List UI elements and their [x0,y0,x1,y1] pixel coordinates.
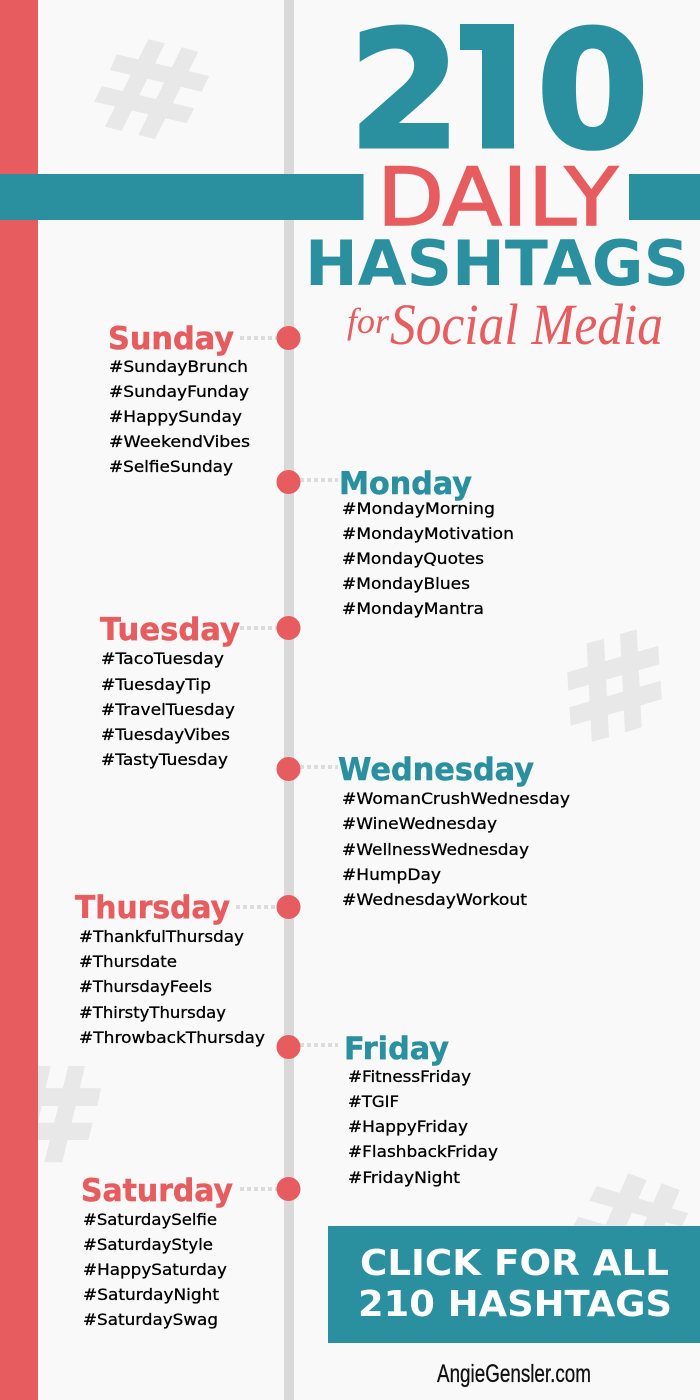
day block: Tuesday: Tuesday [100,612,240,648]
day block: Sunday: #WeekendVibes [109,432,250,451]
day block: Monday: #MondayMotivation [342,524,514,543]
title: Daily: DAILY [377,151,619,244]
day block: Friday [344,1031,498,1187]
day block: Wednesday: #WednesdayWorkout [342,890,527,909]
day block: Thursday: Thursday [75,890,230,926]
title: 210: 210 [348,0,649,186]
call to action button: 210 HASHTAGS [358,1284,672,1325]
day block: Friday: Friday [344,1031,449,1067]
icon: background hash lower left [11,1066,101,1162]
day block: Wednesday: #WineWednesday [342,814,497,833]
day block: Monday: #MondayMorning [342,499,495,518]
call to action button [328,1226,700,1343]
day block: Sunday: #HappySunday [109,407,242,426]
day block: Saturday: #SaturdayStyle [83,1235,213,1254]
day block: Thursday [75,890,265,1047]
day block: Thursday: #ThrowbackThursday [79,1028,265,1047]
teal band right [629,174,700,220]
day block: Wednesday: Wednesday [338,752,534,788]
day block: Thursday: #ThursdayFeels [79,977,212,996]
day block: Tuesday: #TastyTuesday [101,750,228,769]
day block: Friday: #HappyFriday [348,1117,468,1136]
day block: Wednesday: #HumpDay [342,865,441,884]
icon: background hash top left [94,39,209,139]
title: Hashtags: HASHTAGS [305,227,689,300]
left coral strip [0,0,38,1400]
day block: Wednesday: #WellnessWednesday [342,840,529,859]
day block: Thursday: #ThirstyThursday [79,1003,226,1022]
website credit: AngieGensler.com [437,1360,591,1388]
timeline line [284,0,294,1400]
timeline marker: Wednesday [276,757,338,781]
title: 210 [359,24,644,151]
day block: Friday: #FitnessFriday [348,1067,471,1086]
timeline marker: Sunday [240,326,300,350]
day block: Wednesday: #WomanCrushWednesday [342,789,570,808]
timeline marker: Friday [276,1035,338,1059]
teal band left [0,174,364,220]
timeline marker: Monday [276,470,338,494]
day block: Sunday [108,321,250,476]
day block: Tuesday: #TacoTuesday [101,649,224,668]
day block: Saturday: #HappySaturday [83,1260,227,1279]
icon: background hash bottom right [570,1173,688,1276]
day block: Monday: #MondayQuotes [342,549,484,568]
day block: Monday [339,466,514,618]
icon: background hash right [567,629,662,742]
timeline marker: Tuesday [240,616,300,640]
day block: Thursday: #Thursdate [79,952,177,971]
day block: Sunday: Sunday [108,321,234,357]
day block: Saturday: #SaturdaySwag [83,1310,218,1329]
day block: Saturday: #SaturdaySelfie [83,1210,217,1229]
day block: Tuesday [100,612,240,769]
day block: Friday: #FlashbackFriday [348,1142,498,1161]
day block: Friday: #TGIF [348,1092,399,1111]
day block: Saturday: #SaturdayNight [83,1285,219,1304]
day block: Saturday [81,1173,233,1329]
timeline marker: Thursday [236,895,300,919]
day block: Monday: Monday [339,466,472,502]
day block: Friday: #FridayNight [348,1168,460,1187]
day block: Tuesday: #TravelTuesday [101,700,235,719]
day block: Sunday: #SundayBrunch [109,357,248,376]
call to action button: CLICK FOR ALL [360,1243,669,1284]
day block: Tuesday: #TuesdayTip [101,675,211,694]
day block: Saturday: Saturday [81,1173,233,1209]
day block: Thursday: #ThankfulThursday [79,927,244,946]
day block: Sunday: #SundayFunday [109,382,249,401]
subtitle: for Social Media: Social Media [390,292,663,357]
day block: Monday: #MondayBlues [342,574,470,593]
day block: Monday: #MondayMantra [342,599,484,618]
day block: Wednesday [338,752,570,909]
day block: Tuesday: #TuesdayVibes [101,725,230,744]
timeline marker: Saturday [240,1177,300,1201]
subtitle: for Social Media: for [347,301,390,341]
day block: Sunday: #SelfieSunday [109,457,233,476]
